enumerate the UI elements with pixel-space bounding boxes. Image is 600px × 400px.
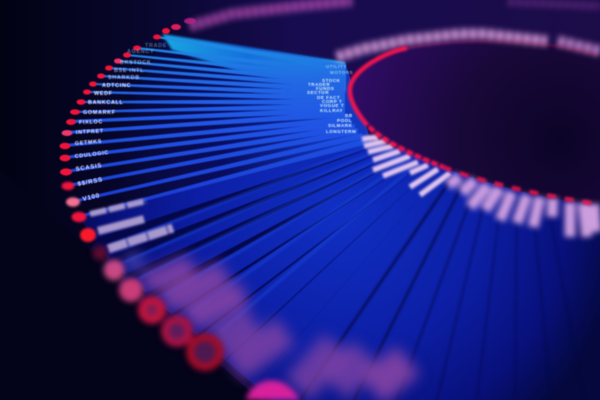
left labels [75, 43, 167, 203]
hub labels: STOCK [322, 78, 341, 83]
blurred labels: large [90, 201, 173, 249]
left labels: $$/RSS [77, 176, 103, 188]
hub labels [307, 64, 356, 134]
left labels: BANKCALL [88, 100, 124, 106]
dark lower left corner [0, 170, 260, 400]
left labels: INTPRET [76, 129, 104, 136]
hub labels: POOL [337, 118, 352, 123]
left labels: V100 [82, 192, 101, 203]
left labels: BSE INTL [114, 68, 144, 74]
hub labels: KILLRAY [320, 108, 343, 113]
left labels: WEDF [94, 91, 113, 97]
lower blue fan field [79, 140, 600, 400]
foreground blurred red dots [92, 246, 300, 400]
blurred labels: foreground purple bars [126, 259, 408, 390]
dark gaps between lower rays [90, 146, 441, 390]
faint gap lines at the bottom right [300, 178, 584, 400]
hub labels: DE FACT [317, 95, 340, 100]
upper blue field [79, 34, 372, 217]
left labels: CDULOGIC [75, 150, 109, 160]
red inner ring [350, 41, 598, 204]
left labels: SHARKDB [108, 75, 140, 81]
hub labels: LONGTERM [326, 129, 356, 134]
central dark disc [350, 41, 600, 205]
left labels: GOMARKF [83, 110, 116, 116]
hub labels: UTILITY [326, 64, 347, 69]
hub labels: MOTORS [330, 70, 353, 75]
left labels: AGENCY [127, 49, 154, 55]
left labels: TRADE [145, 43, 167, 49]
left labels: GETMKS [75, 139, 102, 147]
cyan top band [162, 34, 345, 92]
left labels: BKSTOCK [120, 60, 151, 66]
lower ring data bars [362, 137, 596, 237]
larger red data dots [62, 182, 96, 242]
hub labels: CORP T [322, 99, 342, 104]
hub labels: SECTOR [307, 90, 329, 95]
top edge pink data smudges [190, 1, 600, 26]
hub labels: TRADER [308, 82, 330, 87]
hub labels: BB [345, 113, 353, 118]
soft ray lines in lower field [110, 144, 415, 332]
top ring data bars [337, 34, 600, 57]
hub labels: FUNDS [316, 86, 334, 91]
hub labels: SILMARK [328, 123, 353, 128]
left labels: FIXLOC [79, 119, 103, 126]
hub labels: VOGUE T [320, 103, 344, 108]
data rays: upper fan [65, 36, 367, 218]
left labels: ADTCINC [102, 83, 131, 89]
outer red data dots [60, 18, 196, 176]
left labels: SCASIS [75, 163, 103, 173]
